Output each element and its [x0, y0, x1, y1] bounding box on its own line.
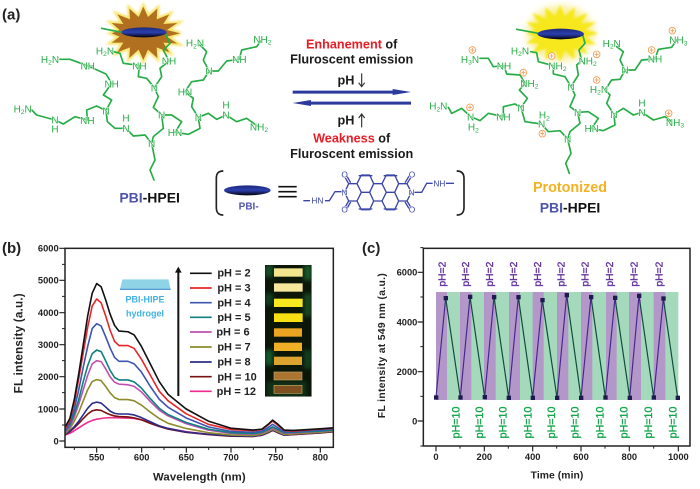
cycling data lines [436, 295, 678, 398]
equivalence sign [278, 187, 297, 197]
protonated atom labels: 2 [436, 106, 440, 113]
legend: pH = 4 [217, 297, 251, 309]
pH=2 labels: pH=2 [581, 261, 592, 287]
protonated atom labels: N [601, 85, 608, 96]
polymer atom labels: N [148, 139, 155, 150]
polymer atom labels: H [122, 114, 130, 125]
polymer atom labels: H [41, 55, 48, 66]
legend: pH = 6 [216, 327, 250, 339]
polymer atom labels: N [107, 46, 114, 57]
polymer bonds [448, 29, 677, 173]
protonated atom labels: NH [548, 61, 563, 72]
pH=10 labels: pH=10 [497, 407, 509, 438]
purple pH=2 bands [436, 292, 665, 400]
protonated atom labels: N [564, 135, 571, 146]
polymer atom labels: N [122, 124, 130, 135]
panel c: cycling chart [377, 248, 690, 482]
PBI molecule structure [303, 169, 454, 214]
protonated atom labels: HN [584, 124, 599, 135]
x-axis title: Time (min) [531, 471, 583, 482]
text: weakness: Weakness of [313, 132, 391, 146]
pH=2 labels: pH=2 [485, 261, 496, 287]
polymer atom labels: N [205, 67, 213, 78]
icon: yellow glowing starburst [527, 6, 597, 61]
polymer atom labels: HN [178, 87, 192, 98]
y-axis tick labels: 3000 [38, 340, 59, 350]
text: fluorescent emission top: Fluroscent emission [290, 53, 413, 67]
y-axis tick labels: 4000 [397, 317, 417, 327]
legend: pH = 7 [217, 341, 251, 353]
polymer atom labels: N [25, 104, 32, 115]
protonated atom labels: N [614, 39, 621, 50]
protonated atom labels: H [511, 46, 518, 57]
panel label (b): (b) [2, 240, 21, 257]
polymer bonds [32, 28, 262, 180]
legend [190, 267, 257, 398]
protonated atom labels: NH [497, 61, 511, 72]
polymer atom labels: NH [80, 116, 95, 127]
x-axis title: Wavelength (nm) [153, 472, 246, 484]
legend: pH = 8 [217, 356, 251, 368]
y-axis tick labels: 5000 [38, 276, 59, 286]
bracket: left [216, 171, 223, 215]
pH=2 labels: pH=2 [461, 261, 472, 287]
protonated atom labels: NH [666, 118, 680, 129]
label: hydrogel: hydrogel [126, 308, 164, 318]
legend: pH = 12 [217, 386, 256, 398]
pH=10 labels [450, 407, 679, 438]
polymer atom labels: N [222, 111, 230, 122]
panel label (c): (c) [362, 240, 380, 257]
PBI molecule structure: O [409, 169, 416, 179]
protonated atom labels: H [603, 39, 610, 50]
protonated atom labels: 2 [546, 115, 550, 122]
y-axis tick labels: 0 [412, 416, 417, 426]
label: Protonized PBI-HPEI: Protonized [533, 180, 607, 196]
polymer atom labels: NH [80, 61, 95, 72]
pH=2 labels: pH=2 [605, 261, 616, 287]
data markers [434, 293, 680, 400]
pH=10 labels: pH=10 [643, 407, 655, 438]
x-axis tick labels [89, 453, 328, 463]
protonated atom labels: N [522, 46, 529, 57]
panel label (a): (a) [2, 6, 20, 24]
protonated atom labels: 3 [468, 60, 472, 67]
label: Protonized PBI-HPEI: PBI-HPEI [540, 199, 600, 215]
chart frame and axes [418, 248, 690, 451]
x-axis tick labels: 1000 [668, 452, 689, 462]
protonated atom labels: H [638, 98, 646, 109]
x-axis tick labels: 800 [622, 452, 637, 462]
bracket: right [457, 171, 464, 215]
protonated atom labels: N [610, 110, 618, 121]
positive charge markers [467, 27, 676, 137]
y-axis tick labels: 4000 [38, 308, 59, 318]
pH=10 labels: pH=10 [450, 407, 462, 438]
polymer atom labels: H [51, 125, 59, 136]
pH=2 labels: pH=2 [509, 261, 520, 287]
protonated atom labels [429, 36, 688, 146]
pH=10 labels: pH=10 [570, 407, 582, 438]
protonated atom labels: 3 [684, 40, 688, 47]
polymer atom labels: H [222, 101, 230, 112]
label: hydrogel [126, 294, 164, 318]
protonated atom labels: H [429, 102, 436, 113]
legend: pH = 2 [217, 267, 251, 279]
pH=10 labels: pH=10 [619, 407, 631, 438]
polymer atom labels: 2 [264, 127, 268, 134]
protonated atom labels: H [461, 55, 468, 66]
legend: pH = 5 [217, 312, 251, 324]
polymer atom labels: HN [168, 128, 182, 139]
polymer atom labels: NH [132, 61, 147, 72]
polymer atom labels: N [51, 115, 59, 126]
icon: PBI ellipse [121, 27, 167, 37]
polymer atom labels [14, 35, 272, 150]
legend: pH = 3 [217, 282, 251, 294]
protonated atom labels: 2 [593, 61, 597, 68]
protonated atom labels: N [440, 102, 447, 113]
y-axis tick labels: 2000 [397, 367, 417, 377]
polymer atom labels: 2 [21, 109, 25, 116]
pH=10 labels: pH=10 [522, 407, 534, 438]
icon: PBI ellipse [537, 29, 584, 39]
protonated atom labels: NH [669, 36, 684, 47]
y-axis title: FL intensity (a.u.) [13, 293, 26, 393]
pH=10 labels: pH=10 [474, 407, 486, 438]
x-axis tick labels: 600 [134, 453, 149, 463]
text: pH down: pH [338, 74, 354, 88]
label: Protonized PBI-HPEI [533, 180, 607, 215]
arrow: forward [293, 89, 411, 95]
x-axis tick labels: 0 [433, 452, 439, 462]
y-axis tick labels: 6000 [397, 268, 417, 278]
chart frame and axes [59, 248, 333, 453]
protonated atom labels: NH [648, 55, 662, 66]
polymer atom labels: NH [232, 55, 247, 66]
protonated atom labels: NH [579, 56, 593, 67]
polymer atom labels: NH [104, 79, 119, 90]
x-axis tick labels [433, 452, 689, 462]
polymer atom labels: H [186, 39, 193, 50]
panel a: centre equilibrium [216, 37, 464, 215]
protonated atom labels: N [472, 55, 479, 66]
polymer atom labels: N [52, 55, 59, 66]
polymer atom labels: N [197, 39, 204, 50]
x-axis tick labels: 650 [179, 453, 194, 463]
protonated atom labels: N [538, 120, 545, 131]
protonated atom labels: NH [496, 112, 511, 123]
PBI molecule structure: O [341, 204, 348, 214]
protonated atom labels: N [517, 103, 525, 114]
polymer atom labels: N [195, 113, 202, 124]
x-axis tick labels: 600 [573, 452, 589, 462]
pH=2 labels: pH=2 [629, 261, 640, 287]
panel a: protonized polymer [429, 6, 688, 215]
protonated atom labels: N [567, 82, 575, 93]
y-axis tick labels: 6000 [38, 244, 59, 254]
x-axis tick labels: 750 [268, 453, 283, 463]
polymer atom labels: N [158, 111, 165, 122]
y-axis tick labels: 1000 [38, 404, 59, 414]
label: PBI-: PBI- [239, 201, 259, 212]
polymer atom labels: 2 [193, 43, 197, 50]
protonated atom labels: 2 [597, 90, 601, 97]
spectra curves [65, 284, 333, 436]
x-axis tick labels: 800 [313, 453, 328, 463]
label: hydrogel: PBI-HIPE [126, 294, 164, 304]
y-axis tick labels: 2000 [38, 372, 59, 382]
y-axis tick labels [397, 268, 417, 426]
text: enhancement: Enhanement of [306, 37, 398, 51]
text: pH down [338, 73, 365, 88]
protonated atom labels: N [621, 66, 629, 77]
y-axis tick labels: 0 [53, 436, 59, 446]
pH=10 labels: pH=10 [667, 407, 679, 438]
photo inset: hydrogel samples [265, 265, 312, 397]
PBI molecule structure: O [341, 169, 348, 179]
PBI molecule structure: N [409, 187, 415, 197]
green pH=10 bands [436, 292, 678, 400]
y-axis title: FL intensity at 549 nm (a.u.) [377, 273, 388, 418]
PBI molecule structure: O [409, 204, 416, 214]
icon: hydrogel slab [120, 279, 171, 290]
polymer atom labels: 2 [48, 60, 52, 67]
pH=2 labels: pH=2 [438, 261, 449, 287]
pH=2 labels: pH=2 [655, 261, 666, 287]
pH=2 labels: pH=2 [557, 261, 568, 287]
pH=2 labels [438, 261, 666, 287]
protonated atom labels: H [590, 85, 597, 96]
x-axis tick labels: 700 [223, 453, 239, 463]
protonated atom labels: 3 [680, 123, 684, 130]
icon: brown starburst [112, 7, 180, 60]
protonated atom labels: 2 [518, 51, 522, 58]
protonated atom labels: NH [520, 79, 535, 90]
pH=10 labels: pH=10 [546, 407, 558, 438]
polymer atom labels: 2 [103, 51, 107, 58]
x-axis tick labels: 400 [525, 452, 540, 462]
x-axis tick labels: 550 [89, 453, 104, 463]
x-axis tick labels: 200 [477, 452, 492, 462]
protonated atom labels: H [468, 123, 475, 134]
protonated atom labels: 2 [563, 66, 567, 73]
PBI molecule structure: N [341, 187, 347, 197]
text: pH up [338, 114, 365, 128]
protonated atom labels: 2 [475, 127, 479, 134]
arrow: increasing intensity [175, 267, 182, 396]
protonated atom labels: 2 [610, 44, 614, 51]
PBI molecule structure: HN [311, 196, 323, 206]
pH=10 labels: pH=10 [595, 407, 607, 438]
protonated atom labels: N [638, 108, 646, 119]
polymer atom labels: NH [253, 35, 268, 46]
protonated atom labels: N [574, 108, 581, 119]
polymer atom labels: H [14, 104, 21, 115]
panel a: PBI-HPEI neutral polymer [14, 7, 272, 205]
polymer atom labels: NH [162, 57, 176, 68]
panel b: spectra chart [13, 244, 333, 484]
text: pH up: pH [338, 114, 354, 128]
legend: pH = 10 [217, 371, 257, 383]
pH=2 labels: pH=2 [533, 261, 544, 287]
text: fluorescent emission bottom: Fluroscent emission [290, 147, 413, 161]
protonated atom labels: 2 [535, 84, 539, 91]
protonated atom labels: N [467, 112, 474, 123]
polymer atom labels: N [151, 83, 158, 94]
PBI molecule structure: NH [433, 178, 445, 188]
protonated atom labels: H [539, 111, 546, 122]
arrow: reverse [293, 100, 411, 106]
y-axis tick labels [38, 244, 59, 446]
polymer atom labels: NH [250, 122, 264, 133]
label: PBI-HPEI: PBI-HPEI [119, 189, 180, 205]
polymer atom labels: 2 [268, 40, 272, 47]
polymer atom labels: N [102, 106, 110, 117]
polymer atom labels: H [96, 46, 103, 57]
icon: PBI ellipse key [224, 185, 271, 195]
